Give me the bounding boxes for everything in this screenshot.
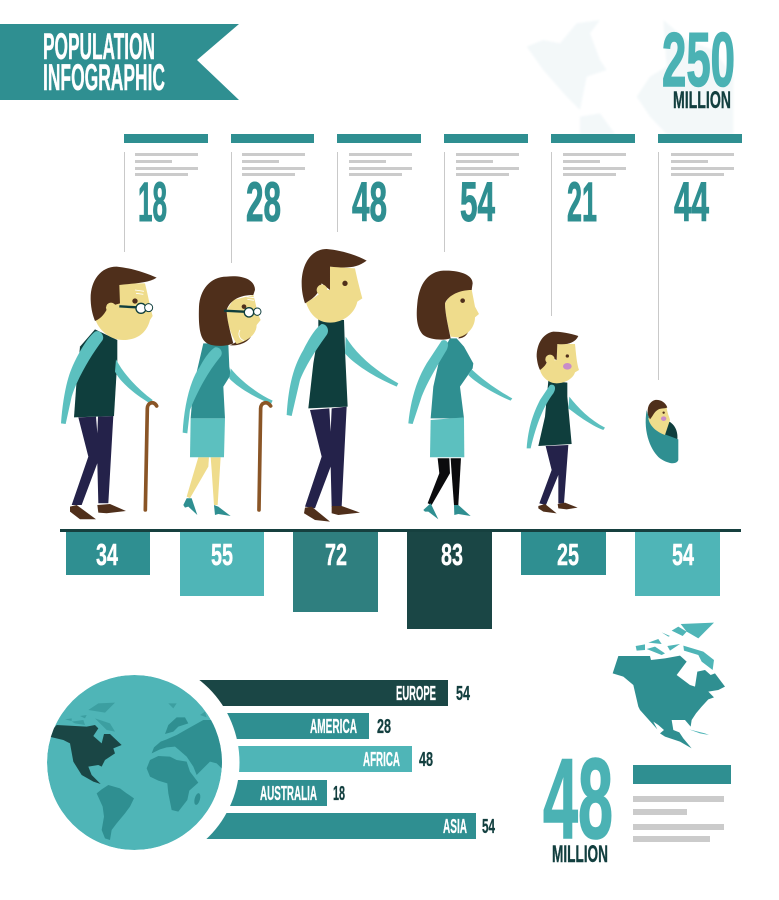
bar: 54: 54 bbox=[672, 537, 694, 572]
ground line bbox=[60, 529, 741, 532]
continent bar chart: 54 bbox=[456, 683, 471, 705]
column 1 header: 18 bbox=[124, 134, 208, 252]
continent bar chart: 18 bbox=[333, 783, 345, 805]
bar: 72: 72 bbox=[325, 537, 347, 572]
column 2 header: 28: 28 bbox=[246, 170, 281, 233]
column 3 header: 48: 48 bbox=[352, 170, 387, 233]
title banner: POPULATION bbox=[43, 26, 155, 67]
map: North America bbox=[613, 623, 725, 748]
total population stat bbox=[662, 18, 735, 114]
bar: 72 bbox=[293, 532, 378, 612]
faint background world map bbox=[527, 20, 733, 134]
figure: baby in wrap bbox=[646, 400, 678, 463]
bar: 25: 25 bbox=[557, 537, 579, 572]
continent bar chart: 48 bbox=[419, 749, 433, 771]
total population stat: MILLION bbox=[673, 87, 731, 114]
bar: 55: 55 bbox=[211, 537, 233, 572]
continent bar chart: EUROPE bbox=[396, 683, 436, 705]
bar: 54 bbox=[635, 532, 720, 596]
figure: old man and woman group bbox=[61, 267, 273, 519]
continent bar chart bbox=[190, 680, 496, 839]
continent bar chart: AMERICA bbox=[310, 716, 357, 738]
continent bar chart: 54 bbox=[482, 816, 496, 838]
column 5 header: 21 bbox=[551, 134, 635, 316]
figure: adult man and woman group bbox=[287, 249, 512, 522]
globe ring bbox=[30, 658, 240, 868]
bar: 83 bbox=[407, 532, 492, 629]
bar: 55 bbox=[180, 532, 264, 596]
column chart below figures bbox=[66, 532, 720, 629]
column 5 header: 21: 21 bbox=[567, 170, 597, 233]
figure: adult man bbox=[287, 249, 398, 522]
title banner: INFOGRAPHIC bbox=[43, 57, 165, 98]
continent bar chart: AUSTRALIA bbox=[260, 783, 317, 805]
continent bar chart: ASIA bbox=[443, 816, 467, 838]
figure: adult woman bbox=[408, 271, 512, 519]
column 3 header: 48 bbox=[337, 134, 421, 233]
figure: old woman with cane bbox=[183, 276, 273, 516]
column 1 header: 18: 18 bbox=[138, 170, 167, 233]
column 4 header: 54: 54 bbox=[460, 170, 495, 233]
bar: 83: 83 bbox=[441, 537, 463, 572]
continent bar chart: 28 bbox=[377, 716, 391, 738]
column 4 header: 54 bbox=[444, 134, 528, 252]
globe bbox=[47, 675, 227, 850]
North America stat: 48 bbox=[543, 736, 613, 863]
bar: 34 bbox=[66, 532, 150, 575]
bar: 25 bbox=[521, 532, 606, 575]
North America text block bbox=[633, 765, 731, 842]
North America stat: MILLION bbox=[552, 841, 608, 868]
bar: 34: 34 bbox=[96, 537, 118, 572]
continent bar chart: AFRICA bbox=[363, 749, 400, 771]
North America stat bbox=[543, 736, 613, 868]
figure: old man with cane bbox=[61, 267, 157, 519]
figure: boy bbox=[527, 332, 605, 513]
column 6 header: 44 bbox=[658, 134, 742, 380]
column 2 header: 28 bbox=[231, 134, 314, 263]
figure: boy and baby group bbox=[527, 332, 678, 513]
title banner bbox=[0, 24, 239, 100]
column 6 header: 44: 44 bbox=[674, 170, 709, 233]
